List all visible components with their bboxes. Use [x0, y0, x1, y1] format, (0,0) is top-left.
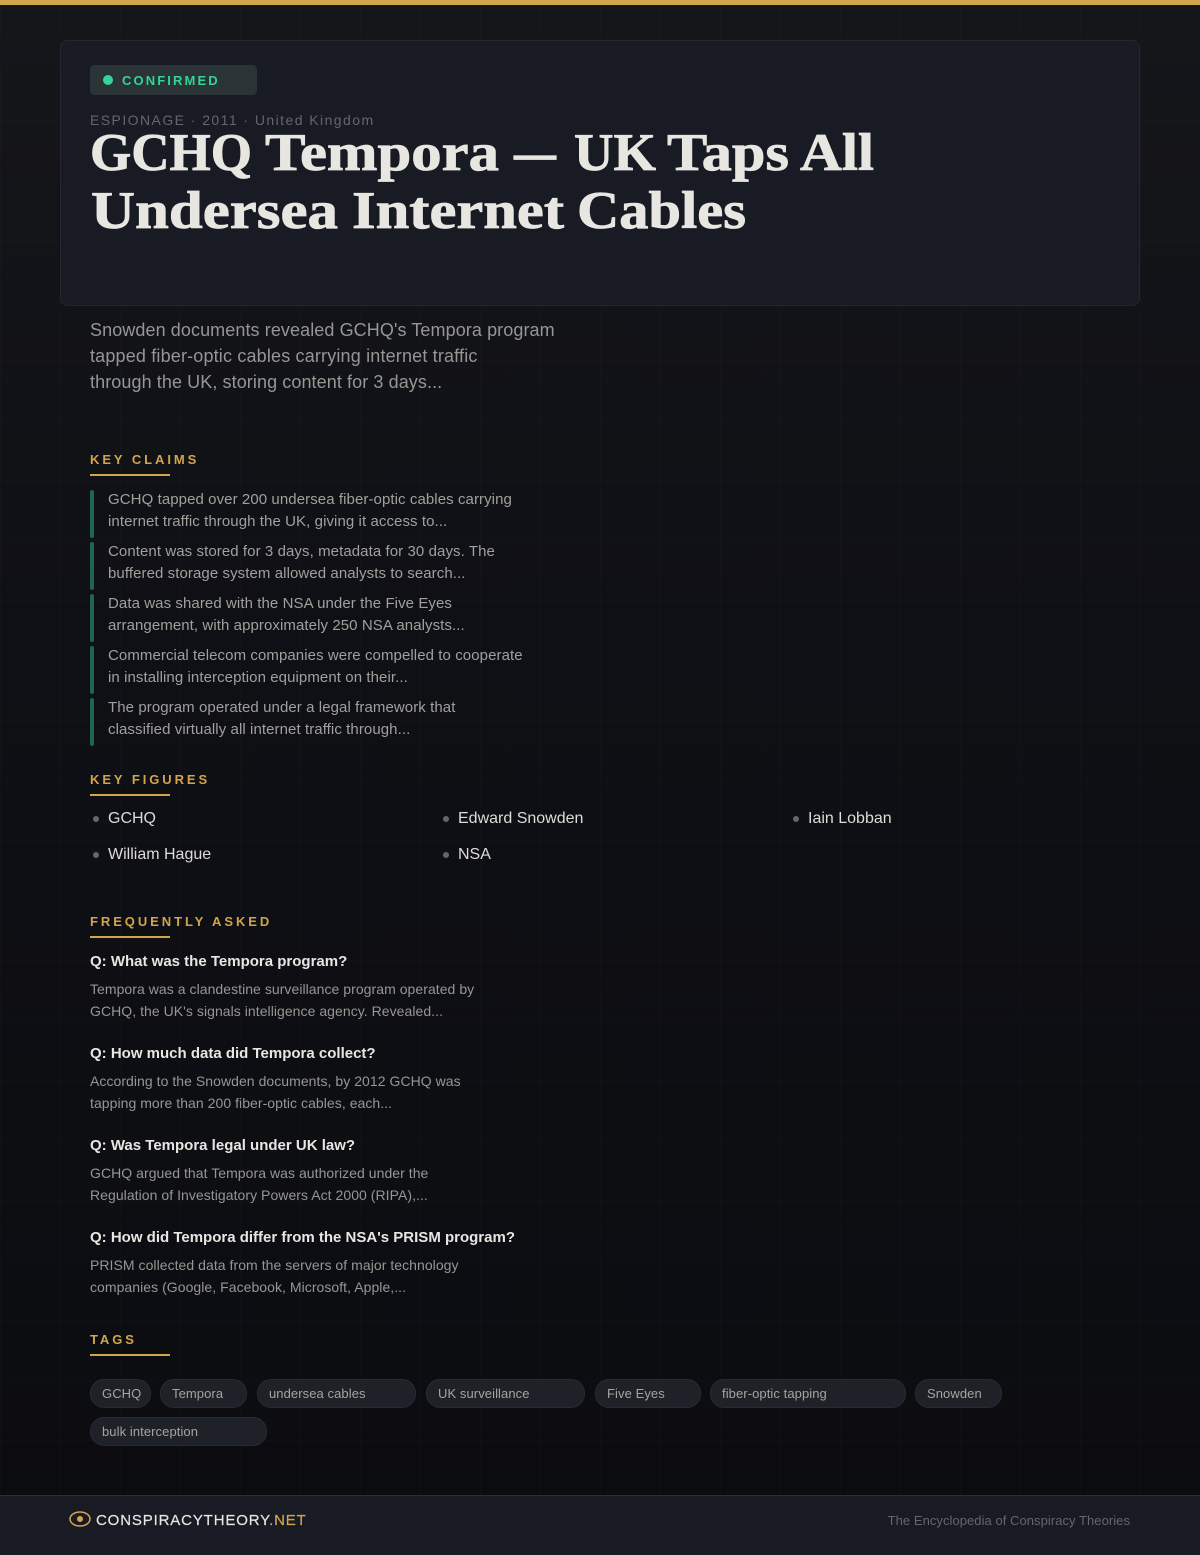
heading: frequently asked: FREQUENTLY ASKED	[90, 914, 272, 929]
badge label: CONFIRMED	[122, 72, 220, 88]
tag: bulk interception	[90, 1417, 267, 1446]
title: Undersea	[91, 182, 338, 240]
faq 1: Tempora was a clandestine surveillance program operated by	[90, 981, 474, 997]
figure: GCHQ: GCHQ	[108, 810, 156, 827]
faq 2	[90, 1045, 461, 1111]
title: Taps	[667, 124, 789, 182]
faq 3	[90, 1137, 428, 1203]
claim 3: arrangement, with approximately 250 NSA analysts...	[108, 617, 465, 634]
faq 2: According to the Snowden documents, by 2012 GCHQ was	[90, 1073, 461, 1089]
top accent bar	[0, 0, 1200, 5]
faq 3: GCHQ argued that Tempora was authorized under the	[90, 1165, 428, 1181]
claim 1: internet traffic through the UK, giving it access to...	[108, 513, 447, 530]
tag: Snowden	[915, 1379, 1002, 1408]
claim 3	[90, 594, 465, 642]
faq 4: Q: How did Tempora differ from the NSA's PRISM program?	[90, 1229, 515, 1246]
figure: William Hague: William Hague	[108, 846, 211, 863]
footer tagline: The Encyclopedia of Conspiracy Theories	[888, 1513, 1130, 1528]
figure: Iain Lobban: Iain Lobban	[808, 810, 892, 827]
intro text: tapped fiber-optic cables carrying internet traffic	[90, 346, 478, 366]
faq 4: PRISM collected data from the servers of major technology	[90, 1257, 459, 1273]
tag: undersea cables	[257, 1379, 416, 1408]
tag: Five Eyes: Five Eyes	[607, 1386, 665, 1401]
tag: fiber-optic tapping	[710, 1379, 906, 1408]
faq 1: Q: What was the Tempora program?	[90, 953, 347, 970]
claim 2	[90, 542, 495, 590]
claim 4: in installing interception equipment on their...	[108, 669, 408, 686]
tag: GCHQ	[90, 1379, 151, 1408]
claim 3: Data was shared with the NSA under the Five Eyes	[108, 595, 452, 612]
claim 5: The program operated under a legal framework that	[108, 699, 455, 716]
faq 1: GCHQ, the UK's signals intelligence agency. Revealed...	[90, 1003, 443, 1019]
title: Internet	[352, 182, 564, 240]
icon: eye logo	[69, 1511, 91, 1527]
figure: Edward Snowden: Edward Snowden	[458, 810, 583, 827]
tag: GCHQ: GCHQ	[102, 1386, 141, 1401]
claim 1: GCHQ tapped over 200 undersea fiber-optic cables carrying	[108, 491, 512, 508]
tag: UK surveillance: UK surveillance	[438, 1386, 530, 1401]
title: All	[800, 124, 874, 182]
faq 2: Q: How much data did Tempora collect?	[90, 1045, 376, 1062]
claim 1	[90, 490, 512, 538]
claim 4	[90, 646, 523, 694]
claim 5: classified virtually all internet traffic through...	[108, 721, 410, 738]
tag: bulk interception: bulk interception	[102, 1424, 198, 1439]
tag: undersea cables: undersea cables	[269, 1386, 366, 1401]
faq 1	[90, 953, 474, 1019]
intro text: through the UK, storing content for 3 days...	[90, 372, 442, 392]
title: Cables	[577, 182, 746, 240]
heading: tags: TAGS	[90, 1332, 137, 1347]
tag: Snowden: Snowden	[927, 1386, 982, 1401]
claim 4: Commercial telecom companies were compelled to cooperate	[108, 647, 523, 664]
badge dot	[103, 75, 113, 85]
claims list	[90, 490, 523, 746]
tag: fiber-optic tapping: fiber-optic tapping	[722, 1386, 827, 1401]
footer	[0, 1495, 1200, 1555]
faq 3: Regulation of Investigatory Powers Act 2000 (RIPA),...	[90, 1187, 428, 1203]
faq 2: tapping more than 200 fiber-optic cables, each...	[90, 1095, 392, 1111]
tag: UK surveillance	[426, 1379, 585, 1408]
tag: Tempora	[160, 1379, 247, 1408]
faq 4	[90, 1229, 515, 1295]
brand wordmark: CONSPIRACYTHEORY.NET	[96, 1512, 307, 1528]
intro text: Snowden documents revealed GCHQ's Tempora program	[90, 320, 555, 340]
title: UK	[574, 124, 656, 182]
title: GCHQ	[90, 124, 252, 182]
heading: key claims: KEY CLAIMS	[90, 452, 199, 467]
intro text	[90, 320, 555, 392]
panel: header	[60, 40, 1140, 306]
faq 4: companies (Google, Facebook, Microsoft, Apple,...	[90, 1279, 406, 1295]
title	[90, 124, 874, 240]
title: Tempora	[265, 124, 499, 182]
figure: NSA	[443, 846, 491, 863]
tag: Tempora: Tempora	[172, 1386, 223, 1401]
figure: NSA: NSA	[458, 846, 491, 863]
category meta line: ESPIONAGE · 2011 · United Kingdom	[90, 112, 375, 128]
faq 3: Q: Was Tempora legal under UK law?	[90, 1137, 355, 1154]
claim 5	[90, 698, 456, 746]
claim 2: Content was stored for 3 days, metadata for 30 days. The	[108, 543, 495, 560]
title: —	[513, 124, 557, 182]
tag: Five Eyes	[595, 1379, 701, 1408]
status badge: confirmed	[90, 65, 257, 95]
claim 2: buffered storage system allowed analysts to search...	[108, 565, 465, 582]
heading: key figures: KEY FIGURES	[90, 772, 210, 787]
